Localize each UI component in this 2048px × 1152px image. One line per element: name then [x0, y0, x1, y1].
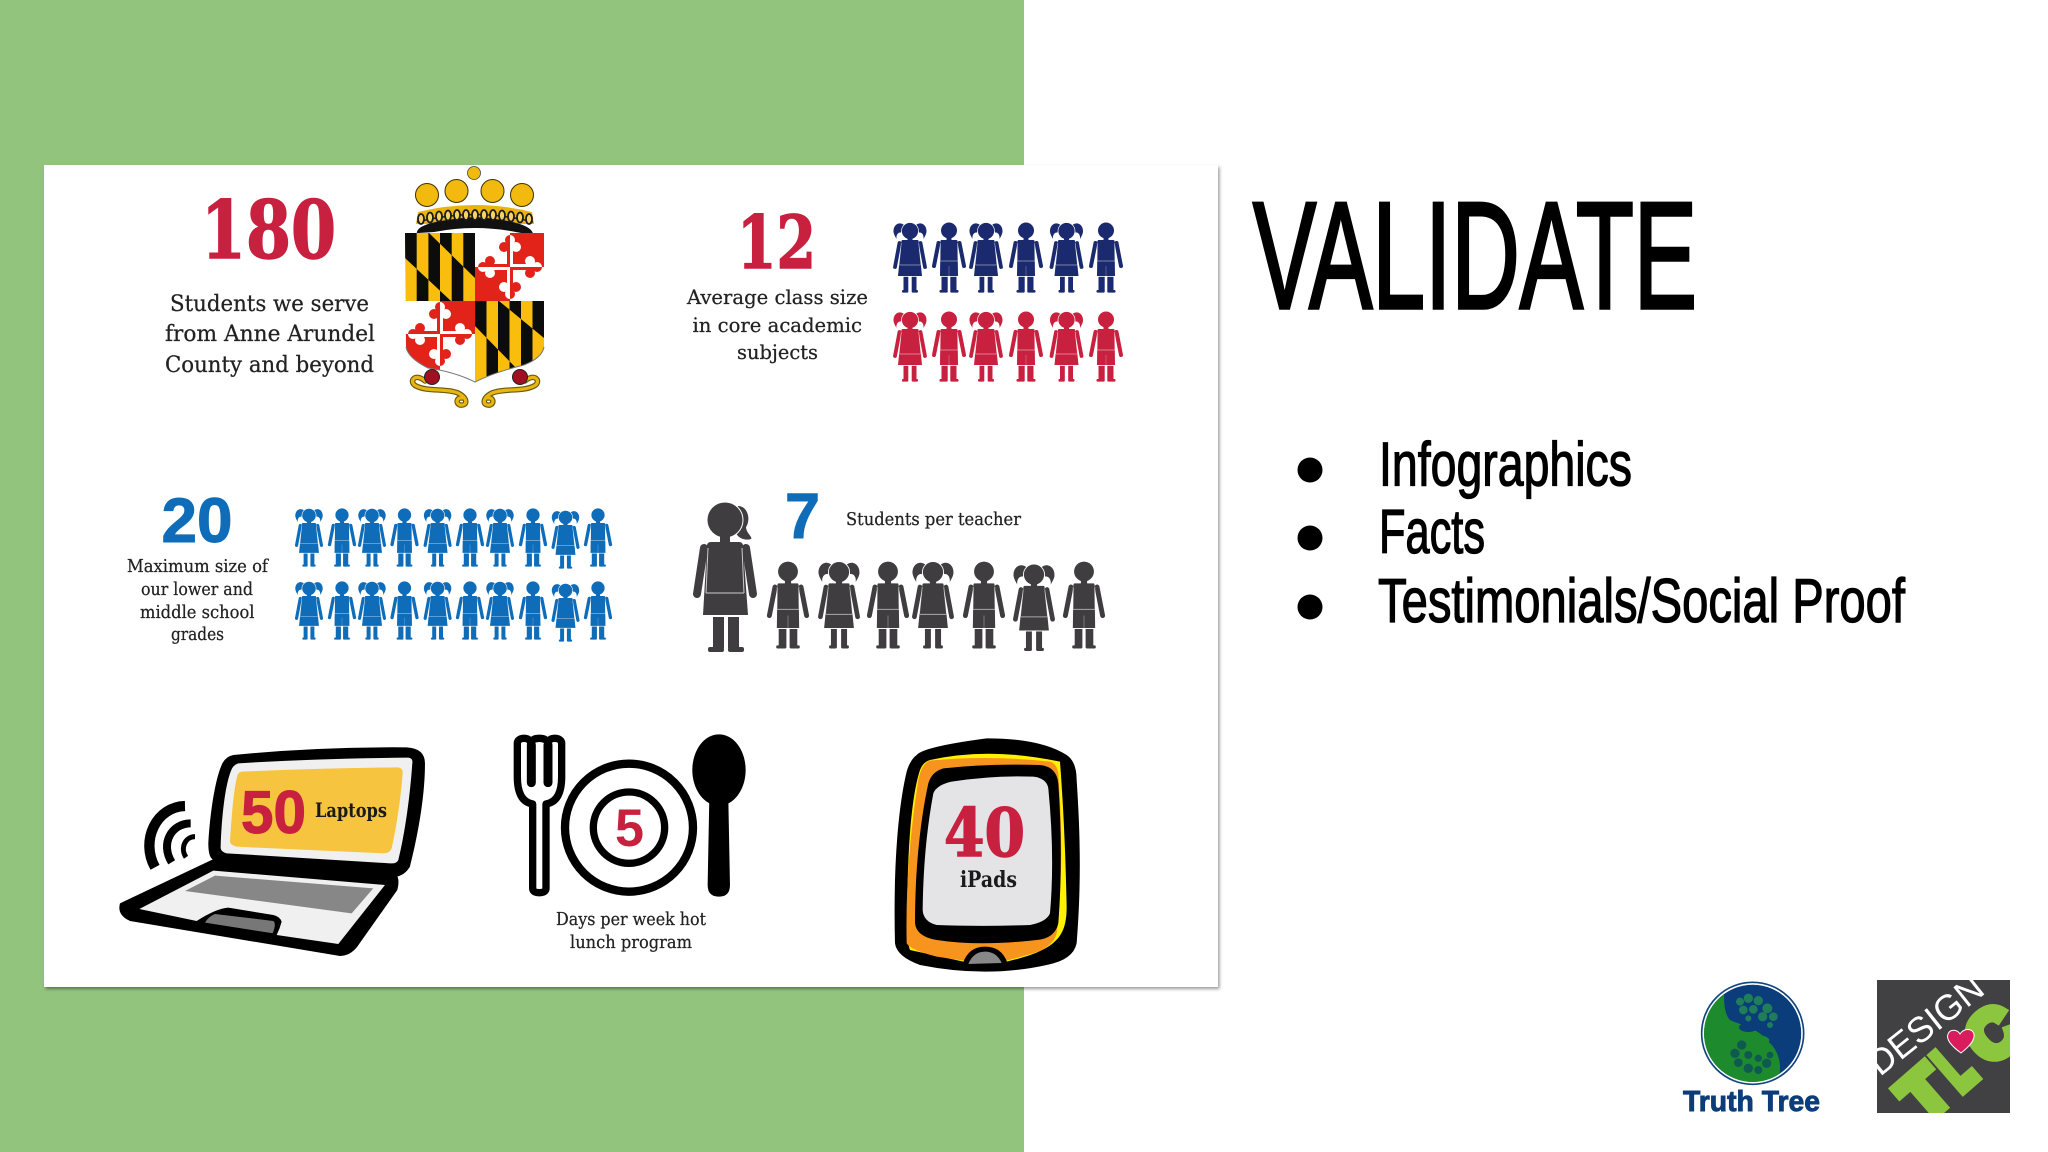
12 description: Average class size	[686, 285, 868, 309]
number 40: 40	[944, 794, 1025, 872]
figures: blue row one	[295, 508, 610, 569]
figures: navy row of students	[893, 222, 1121, 293]
Crossland quarter, bottom left	[406, 301, 475, 370]
20 description: middle school	[140, 602, 255, 623]
tablet body	[895, 738, 1080, 972]
title: VALIDATE	[1253, 171, 1697, 341]
stat: 7 students per teacher	[785, 480, 1021, 552]
crown	[416, 166, 534, 234]
Calvert quarter, bottom right	[475, 301, 544, 383]
bullet: Facts: Facts	[1379, 498, 1485, 567]
iPads label: iPads	[960, 867, 1017, 893]
number 50: 50	[241, 779, 306, 846]
bullet: Facts	[1298, 498, 1485, 567]
180 description: from Anne Arundel	[165, 322, 375, 347]
shield outline bottom	[406, 347, 544, 382]
green background panel	[0, 0, 1024, 1152]
180 description: Students we serve	[170, 292, 369, 317]
spoon	[692, 734, 746, 897]
DESIGN wordmark: DESIGN	[1860, 967, 1992, 1083]
panel: infographic card	[44, 165, 1218, 987]
laptop body	[119, 747, 425, 956]
20 description: Maximum size of	[127, 556, 269, 577]
TLC wordmark: C	[1951, 990, 2035, 1077]
20 description: our lower and	[141, 579, 253, 600]
TLC wordmark	[1888, 1004, 2010, 1113]
bullet: Infographics: Infographics	[1379, 430, 1632, 500]
7 description: Students per teacher	[846, 509, 1021, 530]
stat: 180 students	[165, 183, 375, 378]
stat: 20 maximum size	[127, 486, 269, 645]
figures: blue row two	[295, 581, 610, 642]
12 description: subjects	[737, 340, 818, 364]
logo: Design TLC	[1877, 980, 2010, 1113]
icon: plate with fork and spoon	[517, 734, 746, 953]
number 180: 180	[201, 183, 336, 277]
number 12: 12	[737, 200, 816, 286]
scroll ornaments	[413, 377, 537, 405]
logo: Truth Tree	[1683, 982, 1820, 1118]
180 description: County and beyond	[165, 353, 374, 378]
20 description: grades	[171, 624, 224, 645]
figures: seven dark students	[769, 562, 1103, 651]
wordmark: Truth Tree	[1683, 1086, 1820, 1118]
TLC wordmark: T	[1885, 1052, 1964, 1134]
TLC wordmark: L	[1920, 1031, 1988, 1104]
lunch description: Days per week hot	[556, 909, 707, 930]
180 description	[165, 292, 375, 378]
lunch description	[556, 909, 707, 953]
12 description: in core academic	[692, 313, 862, 337]
wifi arcs	[149, 806, 195, 867]
20 description	[127, 556, 269, 645]
plate	[565, 764, 693, 892]
number 7: 7	[785, 480, 820, 552]
number 20: 20	[162, 486, 232, 556]
Crossland quarter, top right	[475, 233, 544, 301]
icon: Maryland coat of arms	[405, 166, 544, 405]
number 5: 5	[615, 799, 644, 858]
icon: laptop with 50 Laptops	[119, 747, 425, 956]
figures: red row of students	[893, 312, 1121, 382]
emblem	[1700, 982, 1804, 1085]
stat: 12 class size	[686, 200, 868, 364]
bullet list	[1298, 430, 1906, 636]
red gems	[424, 370, 528, 384]
heart	[1948, 1030, 1974, 1053]
bullet: Infographics	[1298, 430, 1632, 500]
Calvert quarter, top left	[405, 233, 475, 301]
12 description	[686, 285, 868, 364]
icon: tablet with 40 iPads	[895, 738, 1080, 972]
lunch description: lunch program	[570, 932, 692, 953]
fork	[517, 738, 562, 893]
figure: teacher	[697, 502, 753, 652]
shield quarters	[405, 233, 544, 384]
Laptops label: Laptops	[315, 798, 387, 822]
